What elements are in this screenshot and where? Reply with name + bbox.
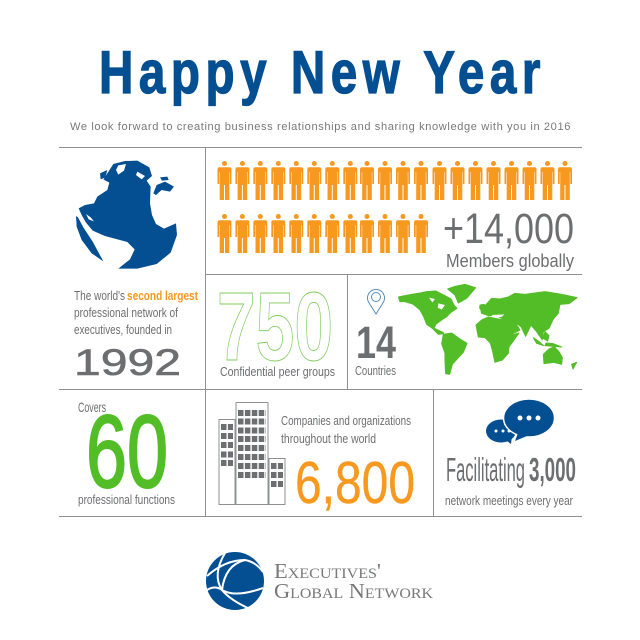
grid lines: [59, 147, 582, 516]
panel: countries: [355, 284, 577, 378]
year: 1992: [74, 342, 181, 383]
green number: 60: [86, 394, 168, 509]
outlined number: 750: [217, 272, 333, 381]
description: executives, founded in: [74, 322, 172, 337]
logo wordmark: Global Network: [274, 579, 433, 603]
description: professional network of: [74, 305, 178, 320]
panel: founding: [74, 161, 199, 383]
companies text: throughout the world: [281, 431, 376, 446]
panel: meetings: [445, 399, 576, 508]
functions label: professional functions: [78, 492, 175, 507]
members label: Members globally: [446, 251, 574, 271]
panel: functions: [78, 394, 175, 509]
facilitating heading: Facilitating: [446, 451, 525, 488]
description: [74, 288, 199, 337]
panel: companies: [219, 402, 415, 516]
description: The world's: [74, 288, 125, 303]
peer groups label: Confidential peer groups: [220, 364, 335, 379]
icon: map pin: [368, 290, 384, 314]
world map: [398, 284, 577, 374]
icon: speech bubbles: [486, 399, 554, 444]
facilitating heading: 3,000: [529, 451, 576, 488]
covers label: Covers: [78, 399, 106, 415]
logo globe: [206, 552, 264, 610]
subtitle: We look forward to creating business relationships and sharing knowledge with you in 2016: [70, 121, 571, 133]
icon: people rows: [218, 161, 572, 253]
panel: peer groups: [217, 272, 335, 381]
panel: members: [218, 161, 574, 271]
companies text: Companies and organizations: [281, 413, 411, 428]
logo wordmark: Executives': [274, 559, 381, 583]
icon: buildings: [219, 402, 285, 504]
orange number: 6,800: [295, 450, 415, 516]
companies text: [281, 413, 411, 446]
icon: globe: [76, 161, 177, 269]
meetings label: network meetings every year: [445, 493, 574, 508]
countries label: Countries: [355, 363, 396, 378]
description: second largest: [127, 288, 199, 303]
logo: [206, 552, 433, 610]
logo wordmark: [274, 559, 433, 603]
countries number: 14: [356, 317, 396, 368]
members number: +14,000: [443, 205, 574, 253]
